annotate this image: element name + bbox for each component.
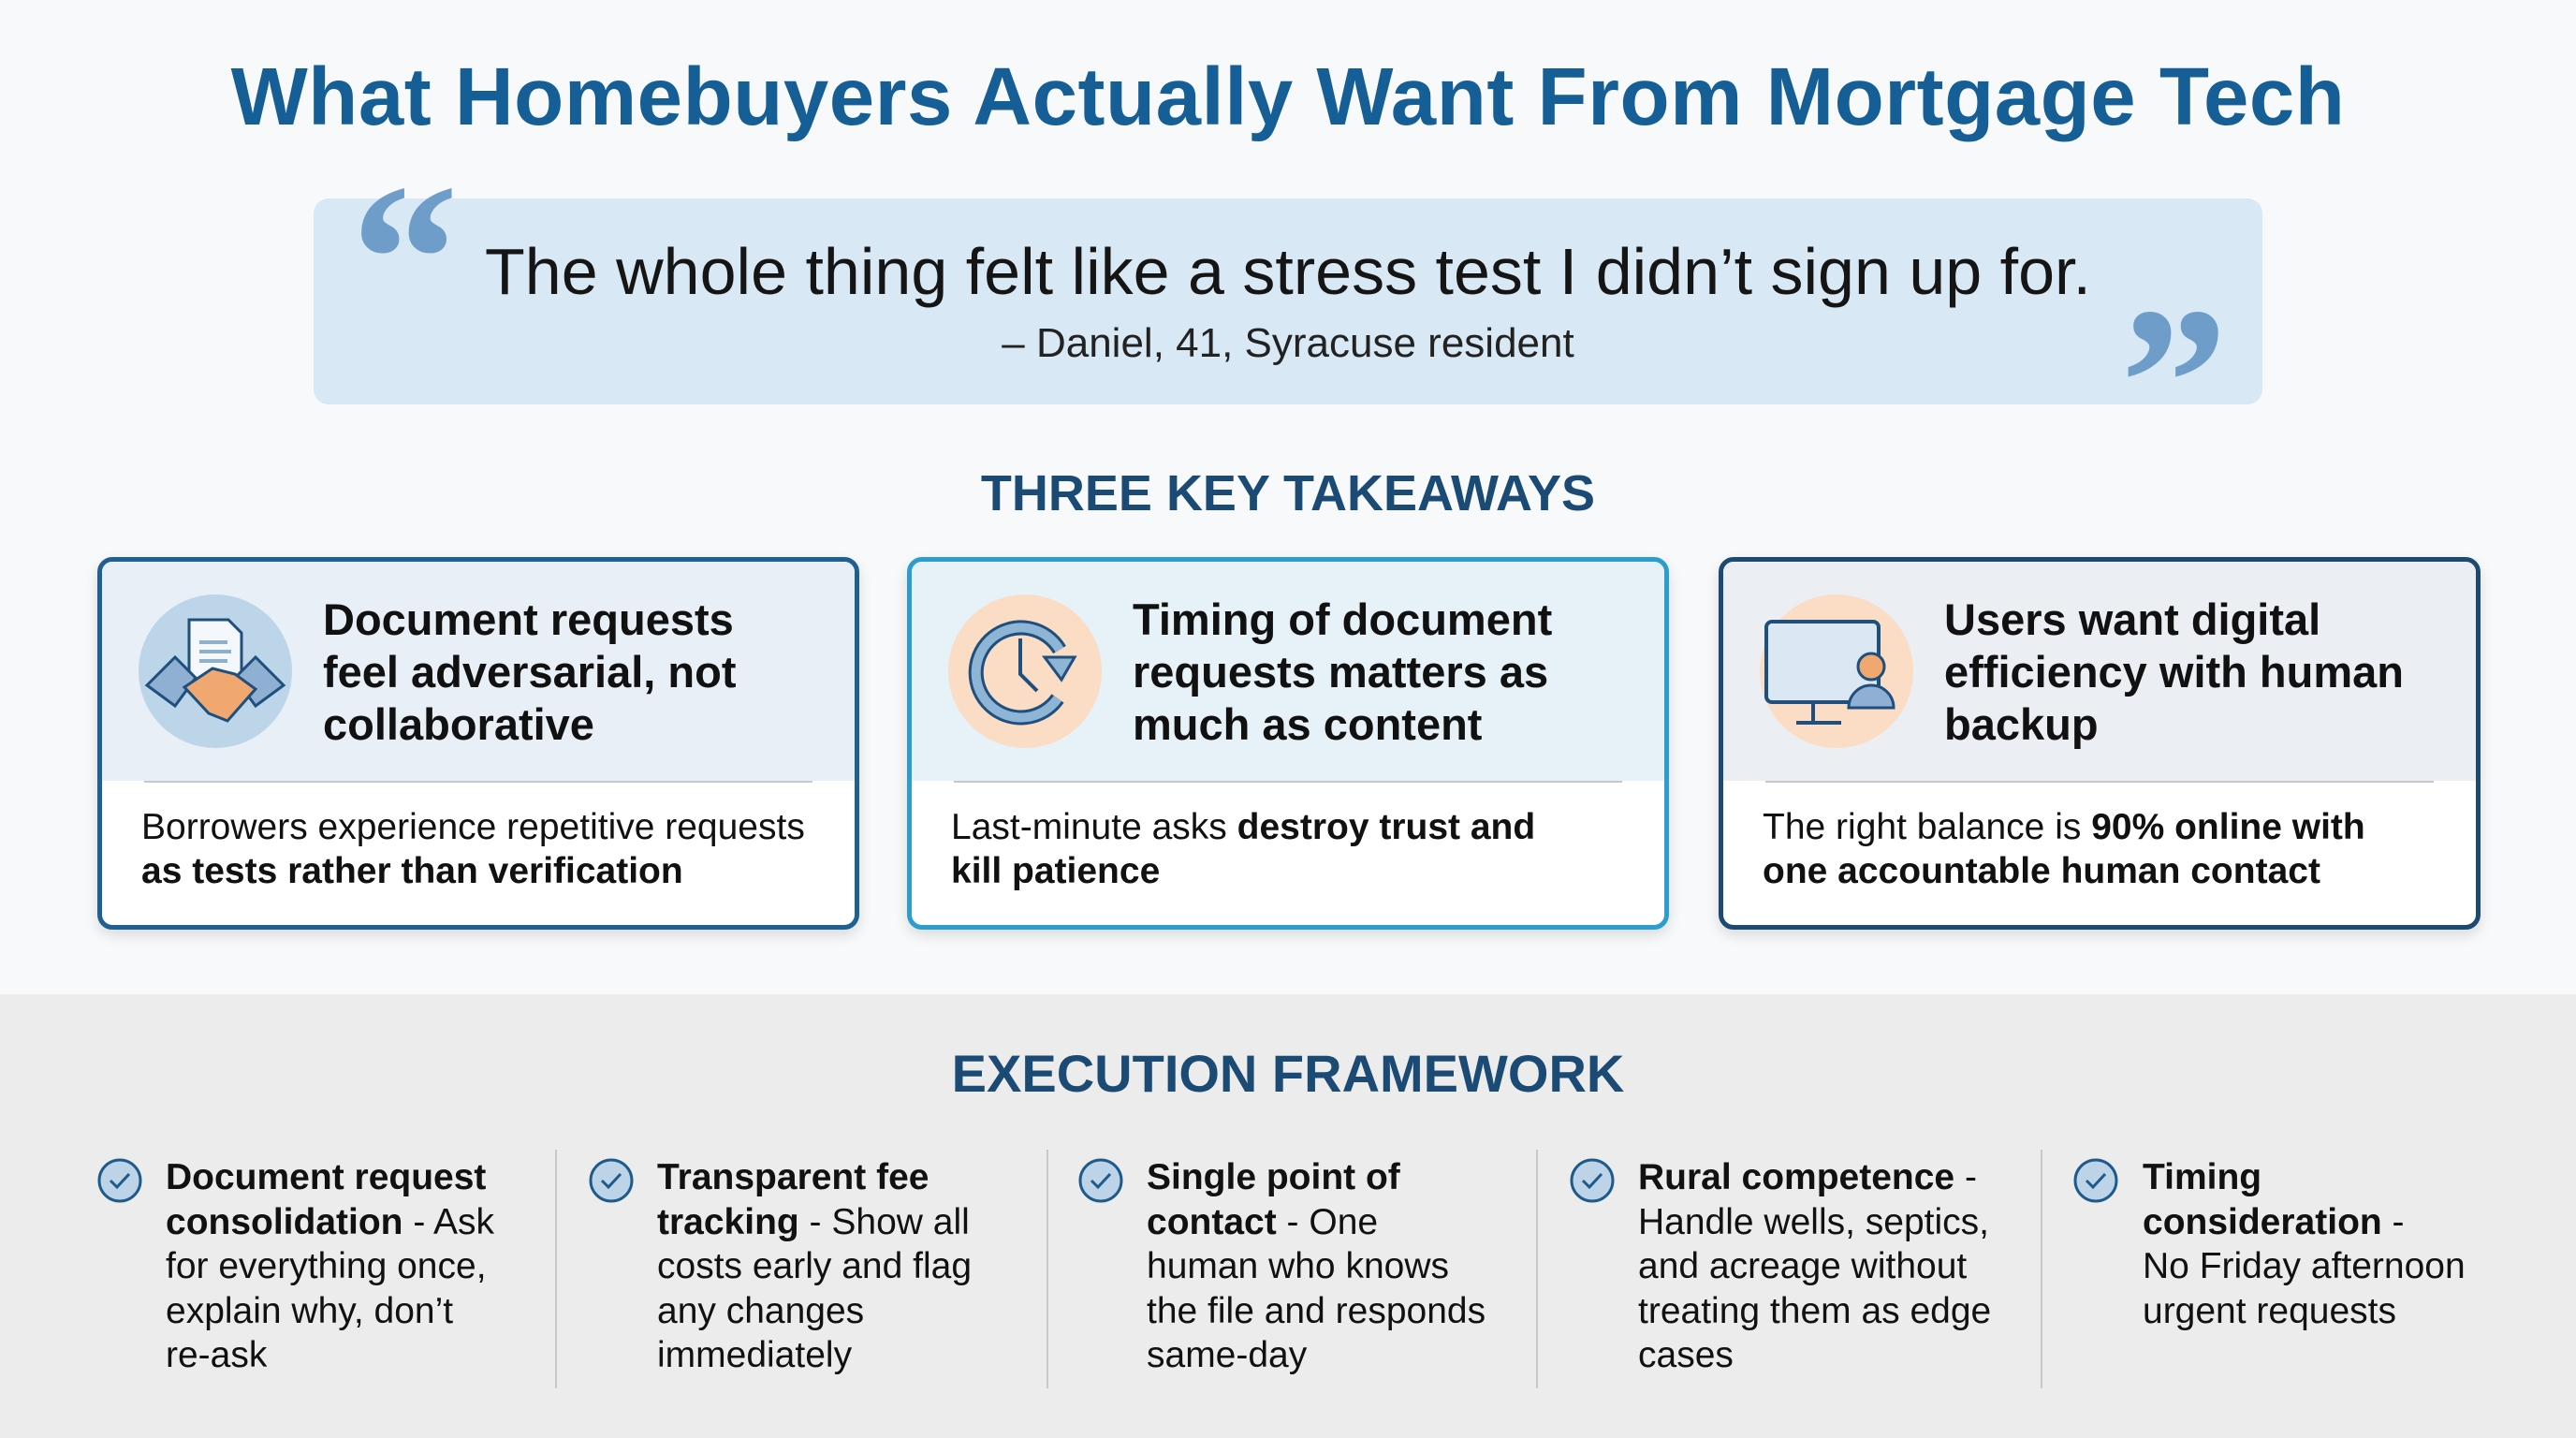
card heading: requests matters as [1133,647,1548,697]
card 3 [1719,557,2481,930]
text: Document request [166,1157,486,1197]
text: Single point of [1147,1157,1400,1197]
card heading: feel adversarial, not [323,647,736,697]
text [657,1157,972,1375]
card body: Borrowers experience repetitive requests [141,807,805,847]
text: explain why, don’t [166,1290,453,1331]
icon: check [1571,1159,1614,1202]
text [1638,1157,1991,1375]
item 1 [97,1157,494,1375]
text: human who knows [1147,1246,1449,1286]
card body: as tests rather than verification [141,851,683,891]
icon: check [2074,1159,2117,1202]
text: cases [1638,1335,1734,1375]
card body: Last-minute asks destroy trust and [951,807,1535,847]
text: and acreage without [1638,1246,1967,1286]
text [166,1157,494,1375]
text: any changes [657,1290,864,1331]
text: consolidation - Ask [166,1202,494,1241]
text: Rural competence - [1638,1157,1977,1197]
text: for everything once, [166,1246,487,1286]
title: What Homebuyers Actually Want From Mortgage Tech [231,51,2345,142]
card heading: much as content [1133,699,1482,749]
attribution: – Daniel, 41, Syracuse resident [1002,320,1574,366]
card 1 [97,557,859,930]
text: the file and responds [1147,1290,1486,1331]
text: contact - One [1147,1202,1378,1241]
text [1147,1157,1486,1375]
card 2 [907,557,1669,930]
card body: kill patience [951,851,1160,891]
icon: open quote mark: “ [351,139,459,378]
card heading [1944,594,2404,749]
execution framework section [0,994,2576,1438]
text: treating them as edge [1638,1290,1991,1331]
text: re-ask [166,1335,267,1375]
card heading: efficiency with human [1944,647,2404,697]
text: consideration - [2143,1202,2405,1241]
text: No Friday afternoon [2143,1246,2466,1286]
heading: three key takeaways: THREE KEY TAKEAWAYS [981,465,1595,521]
text: urgent requests [2143,1290,2396,1331]
card body: The right balance is 90% online with [1763,807,2365,847]
text: Timing [2143,1157,2261,1197]
card heading [323,594,736,749]
card heading: Timing of document [1133,594,1552,644]
text [2143,1157,2466,1331]
icon: clock with arrow [948,594,1102,748]
card body [1763,807,2365,891]
card heading [1133,594,1552,749]
text: Handle wells, septics, [1638,1202,1989,1241]
card body [951,807,1535,891]
item 4 [1571,1157,1991,1375]
text: tracking - Show all [657,1202,970,1241]
text: Transparent fee [657,1157,929,1197]
text: costs early and flag [657,1246,972,1286]
quote text: The whole thing felt like a stress test I didn’t sign up for. [485,235,2091,308]
item 2 [590,1157,972,1375]
card body [141,807,805,891]
item 3 [1078,1157,1486,1375]
card heading: backup [1944,699,2099,749]
text: same-day [1147,1335,1307,1375]
card heading: Document requests [323,594,734,644]
card heading: Users want digital [1944,594,2320,644]
icon: check [1078,1159,1123,1202]
icon: close quote mark: ” [2120,263,2228,502]
icon: check [590,1159,633,1202]
card body: one accountable human contact [1763,851,2320,891]
icon: computer with person [1760,594,1913,748]
item 5 [2074,1157,2466,1331]
card heading: collaborative [323,699,594,749]
text: immediately [657,1335,852,1375]
quote box [314,198,2262,404]
icon: handshake with document [139,594,292,748]
icon: check [97,1159,142,1202]
heading: execution framework: EXECUTION FRAMEWORK [952,1044,1624,1103]
